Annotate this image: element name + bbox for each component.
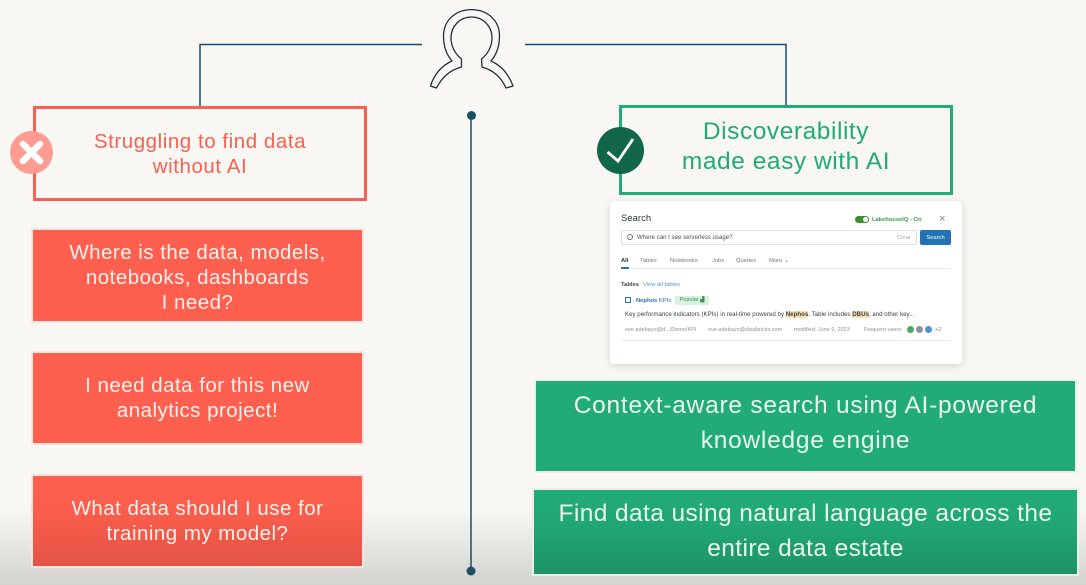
text: context-aware (574, 392, 1037, 454)
result name: Nephos KPIs (636, 298, 671, 304)
icon: check badge (597, 127, 644, 174)
tabs: More ⌄ (769, 258, 789, 264)
card: natural language (534, 490, 1077, 574)
search input: Clear (897, 235, 911, 241)
toggle LakehouseIQ (855, 216, 869, 223)
toggle label: LakehouseIQ - On (872, 217, 922, 223)
tabs: Tables (640, 258, 657, 264)
search button: Search (926, 235, 945, 241)
result owner: eve.adebayo@databricks.com (708, 327, 782, 333)
text: analytics project: analytics project! (117, 399, 278, 422)
tabs: Notebooks (670, 258, 698, 264)
text: analytics project: I need data for this new (85, 374, 310, 397)
search button (920, 230, 951, 245)
result modified: modified: June 9, 2023 (794, 327, 850, 333)
popular badge (675, 296, 709, 305)
search screenshot panel (610, 201, 962, 364)
popular badge: Popular ▟ (680, 297, 704, 303)
heading: struggling: Struggling to find data (94, 130, 306, 153)
card: where is the data (33, 230, 362, 321)
tabs (621, 255, 951, 269)
panel: with AI heading (619, 105, 953, 195)
text: context-aware: Context-aware search using AI-powered (574, 392, 1037, 419)
tables header: Tables (621, 282, 639, 288)
text: where is the data: Where is the data, models, (69, 241, 326, 264)
user avatars: +2 (935, 327, 941, 333)
heading: struggling: without AI (153, 155, 247, 178)
text: natural language: Find data using natural language across the (559, 500, 1052, 527)
search input: Where can I see serverless usage? (637, 234, 733, 241)
card: context-aware search (536, 381, 1075, 471)
text: analytics project (85, 374, 310, 422)
result divider (621, 340, 951, 341)
icon: cross badge (10, 131, 53, 174)
text: training model: training my model? (107, 522, 288, 545)
text: where is the data: notebooks, dashboards (86, 266, 309, 289)
panel: without AI heading (33, 106, 367, 201)
result metadata: eve.adebayo@d.../Demo/KPI (625, 327, 696, 333)
heading: discoverability (682, 118, 890, 175)
text: training model (72, 497, 323, 545)
heading: struggling (94, 130, 306, 178)
tabs: Queries (736, 258, 756, 264)
card: training my model (33, 476, 362, 566)
tabs: Jobs (712, 258, 724, 264)
view all tables: View all tables (643, 282, 680, 288)
user avatars (907, 326, 941, 333)
result description: Key performance indicators (KPIs) in real-time powered by Nephos. Table includes DBUs, and other key... (625, 311, 914, 318)
text: context-aware: knowledge engine (701, 427, 910, 454)
heading: discoverability: Discoverability (703, 118, 869, 145)
tabs: All (621, 258, 628, 264)
text: where is the data: I need? (162, 291, 233, 314)
table icon (625, 297, 631, 303)
heading: discoverability: made easy with AI (682, 148, 890, 175)
text: natural language: entire data estate (707, 535, 904, 562)
frequent users: Frequent users: (864, 327, 903, 333)
card: new analytics project (33, 353, 362, 443)
text: where is the data (69, 241, 326, 314)
text: natural language (559, 500, 1052, 562)
text: training model: What data should I use for (72, 497, 323, 520)
search title: Search (621, 213, 651, 224)
search input (621, 230, 917, 245)
close icon: × (939, 213, 945, 225)
icon: user (430, 9, 514, 89)
bottom shading (0, 510, 1086, 585)
